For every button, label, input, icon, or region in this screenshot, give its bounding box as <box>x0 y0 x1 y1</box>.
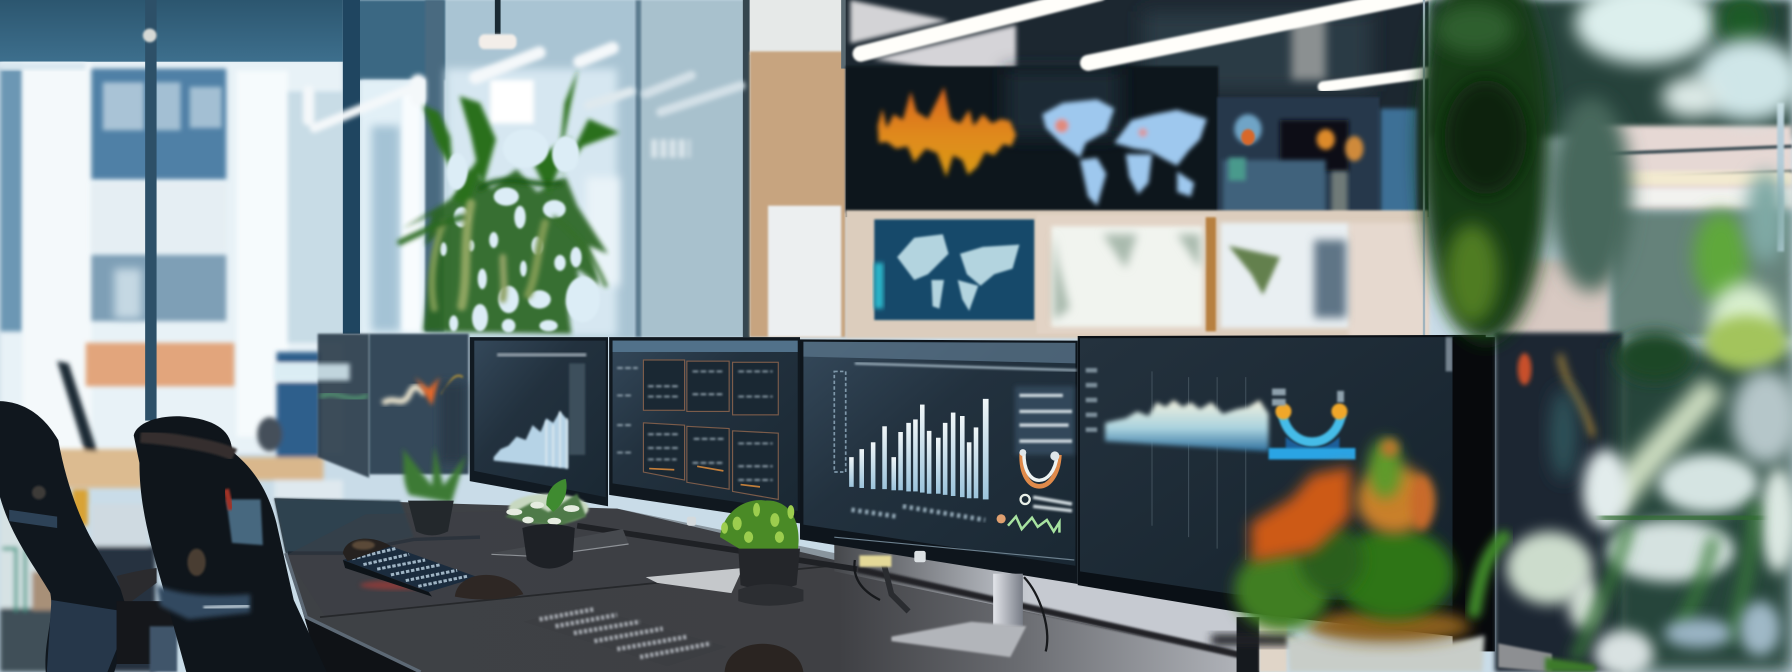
blurred foliage in right foreground <box>1419 0 1792 672</box>
white-green potted plant on desk <box>505 479 589 569</box>
back desk plant <box>402 446 466 535</box>
semicircle gauge <box>1022 453 1059 486</box>
framed green and white map <box>1221 223 1349 328</box>
white highlights at top <box>1575 0 1792 121</box>
front chair left <box>0 401 177 672</box>
wall-mounted dark screen with orange waveform <box>846 66 1218 213</box>
dashboard text lines <box>617 368 773 480</box>
monitor 4: dashboard with panel grid <box>609 337 800 526</box>
keyboard and mouse, front centre <box>523 606 803 672</box>
top leaf tufts <box>423 69 619 206</box>
lower dark mass <box>1611 349 1792 672</box>
foliage mass with jagged outline <box>402 169 608 334</box>
keyboard and mouse, front left <box>343 539 523 600</box>
wall-mounted dashboard panel <box>1217 97 1417 223</box>
pale leaves <box>1506 369 1792 630</box>
floor and lower left <box>0 491 155 672</box>
potted palm plant behind glass <box>400 69 619 334</box>
blurred flowering plant in foreground <box>1211 439 1504 672</box>
glass reflections of ceiling lights <box>309 48 741 149</box>
area chart <box>1105 400 1269 451</box>
large dark leaf <box>1419 0 1552 343</box>
drooping olive leaves <box>400 181 606 309</box>
ceiling pendant lamp <box>479 0 517 49</box>
framed world map screen <box>874 219 1034 320</box>
ceiling light bars <box>861 0 1634 121</box>
small green potted plant on desk <box>720 500 803 606</box>
monitor 7: far right dark screen <box>1495 333 1623 672</box>
monitor 3: rising bar chart <box>470 337 608 506</box>
monitor 1: far translucent screen <box>274 334 369 478</box>
monitor 5: main bar chart dashboard <box>800 339 1078 584</box>
green zigzag sparkline <box>1008 517 1059 533</box>
desk <box>274 498 1246 672</box>
monitor 6: large dark screen with area chart <box>1078 335 1495 651</box>
right background: ceiling and blinds <box>1423 0 1792 338</box>
lower wall with framed displays <box>846 210 1429 338</box>
sunlit gaps between leaves <box>440 129 600 333</box>
grey-green leaf <box>1550 97 1632 291</box>
wall-mounted world map display <box>1042 99 1207 206</box>
back-left wooden table and chair <box>57 352 349 526</box>
pale pot base <box>1594 630 1654 672</box>
smile gauge <box>1282 414 1342 442</box>
framed white map <box>1037 215 1216 334</box>
front chair right <box>134 416 327 672</box>
monitor 2: translucent screen with line chart <box>369 334 469 474</box>
monitor stand and cables <box>854 555 1047 657</box>
bar chart <box>849 399 989 499</box>
ceiling and upper wall behind screens <box>846 0 1429 217</box>
bright green leaves <box>1694 211 1749 303</box>
